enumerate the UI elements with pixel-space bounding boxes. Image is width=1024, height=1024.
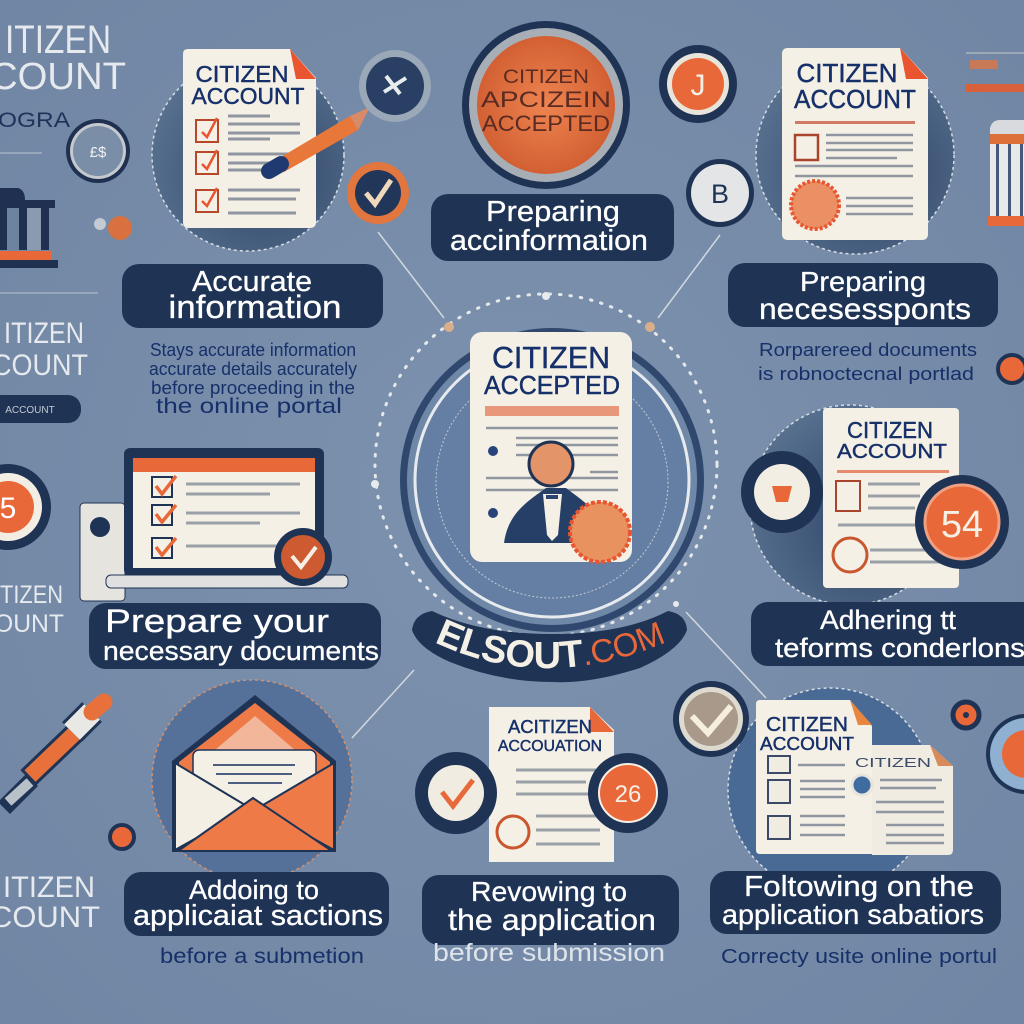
icon: check badge [347,162,409,224]
icon: pen left [4,702,134,849]
icon: document: CITIZEN [796,58,898,88]
caption: Correcty usite online portul [721,946,997,968]
halo circle [152,59,344,251]
heading pill: application sabatiors [722,899,984,930]
halo circle [750,405,950,605]
heading pill [89,603,381,669]
heading pill [422,875,679,945]
icon: overlapping documents: CITIZEN [855,755,931,770]
icon: document [489,707,614,862]
icon: document: ACITIZEN [508,717,592,737]
icon: document: ACCOUNT [794,84,916,114]
icon: white badge [741,451,823,533]
brand fragment: left lower [0,581,64,638]
icon: bank building left [0,188,58,268]
icon: envelope [172,695,336,852]
icon: orange badge [659,45,737,123]
icon: check badge [415,752,497,834]
heading pill: Preparing [800,266,926,297]
icon: overlapping documents: ACCOUNT [760,734,854,754]
panel: right edge items [965,52,1024,383]
heading pill [710,871,1001,934]
icon: document [823,408,959,588]
caption: is robnoctecnal portlad [758,364,974,384]
heading pill: information [168,289,342,325]
decorative connector lines [0,153,766,738]
icon: number badge 54: 54 [941,504,983,546]
halo circle [152,680,352,880]
heading pill: teforms conderlons [775,633,1024,663]
caption [758,340,977,384]
heading pill [751,602,1024,666]
caption: before a submetion [160,945,364,968]
caption: before submission [433,939,665,967]
heading pill: the application [448,904,656,937]
banner fragments [966,52,1024,54]
icon: laptop with checklist [80,448,348,601]
brand fragment: bottom left: ITIZEN [3,871,95,904]
heading pill: necessary documents [103,636,379,666]
panel: reviewing the application [415,707,679,967]
icon: document: CITIZEN [847,417,933,443]
icon: check badge [673,681,749,757]
brand pill: ELSOUT.COM [436,619,664,668]
caption: before proceeding in the [151,378,355,398]
icon: checklist document [183,49,316,228]
icon: coin badge top left [66,119,130,183]
caption: Rorparereed documents [759,340,977,360]
icon: accepted seal: APCIZEIN [481,87,611,112]
halo circle [756,56,954,254]
brand fragment: left middle [0,317,88,423]
panel: preparing information [431,21,754,261]
icon: edge badge [986,714,1024,794]
icon: white badge [686,159,754,227]
icon: accepted seal: ACCEPTED [482,111,610,136]
icon: bank column [988,120,1024,226]
icon: accepted document: CITIZEN [492,340,610,375]
heading pill: Addoing to [189,875,319,905]
panel: preparing necessary documents [728,48,998,384]
heading pill [122,264,383,328]
icon: accepted document: ACCEPTED [484,370,620,400]
icon: accepted document [470,332,632,562]
brand fragment: left middle: ACCOUNT [5,405,55,416]
caption [149,340,357,418]
halo circle [728,688,932,892]
heading pill: Prepare your [105,603,329,639]
caption: Stays accurate information [150,340,356,360]
icon: number badge 54 [915,475,1009,569]
icon: accepted seal [462,21,630,189]
brand fragment: top left: ITIZEN [5,18,111,62]
brand fragment: bottom left [0,871,100,934]
panel: following on the application [673,681,1024,968]
icon: document [782,48,928,240]
heading pill: Adhering tt [820,605,957,635]
brand fragment: left middle: ITIZEN [4,317,84,350]
icon: small orange dot left [94,216,132,240]
icon: top circle badge [359,50,431,122]
icon: number badge: 26 [615,781,641,808]
heading pill [728,263,998,327]
icon: document: ACCOUATION [498,738,602,755]
heading pill: necesessponts [759,293,971,326]
brand fragment: left lower: TIZEN [0,581,63,609]
heading pill: Foltowing on the [744,871,974,903]
icon: overlapping documents [756,700,953,855]
ring [371,292,717,636]
heading pill: Revowing to [471,876,627,907]
heading pill: accinformation [450,225,648,257]
icon: small badge [953,702,979,728]
icon: white badge: B [711,179,729,209]
heading pill [431,194,674,261]
brand fragment: top left [0,18,126,132]
icon: pencil [269,107,370,172]
icon: overlapping documents: CITIZEN [766,714,848,736]
icon: small badge [998,355,1024,383]
panel: accurate information [122,49,431,418]
panel: prepare your necessary documents [80,448,381,669]
icon: number badge left [0,464,51,550]
panel: center accepted document [371,292,718,682]
icon: checklist document: CITIZEN [196,61,288,87]
icon: accepted seal: CITIZEN [503,67,589,88]
icon: orange badge: J [690,69,706,102]
icon: number badge [588,753,668,833]
heading pill: Accurate [192,266,312,298]
heading pill [124,872,389,936]
panel: adhering to terms [741,405,1024,666]
icon: document: ACCOUNT [837,441,947,463]
heading pill: applicaiat sactions [133,900,383,932]
caption: accurate details accurately [149,359,357,379]
caption: the online portal [156,395,342,418]
icon: checklist document: ACCOUNT [192,83,304,109]
icon: number badge left: 5 [0,492,16,525]
icon: coin badge top left: £$ [90,144,107,161]
heading pill: Preparing [486,196,620,228]
panel: adding to application [4,680,389,968]
